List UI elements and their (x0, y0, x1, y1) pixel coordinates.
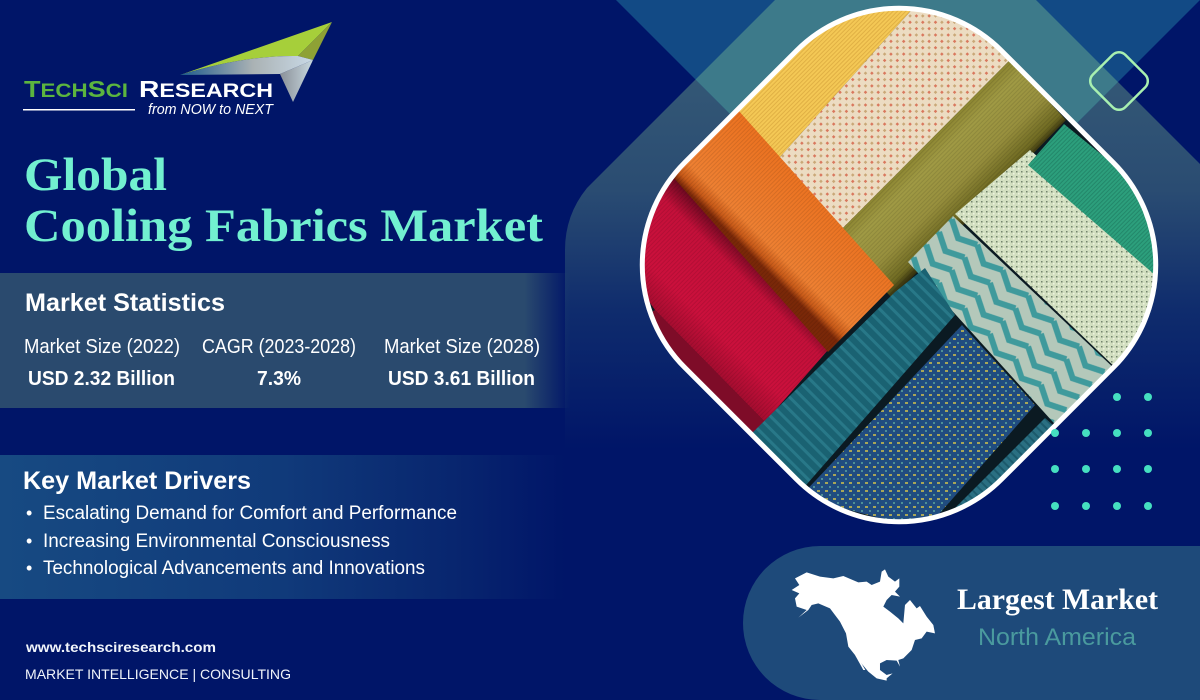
logo wordmark: RESEARCH (139, 76, 273, 102)
background geometric shapes (565, 0, 1200, 402)
herringbone fabric (908, 216, 1118, 432)
panel: largest market (743, 546, 1200, 700)
stat: market size 2028 (384, 336, 540, 390)
logo tagline: from NOW to NEXT (148, 102, 274, 118)
logo wordmark: TECH SCI (24, 76, 128, 102)
stat: market size 2022: USD 2.32 Billion (28, 368, 175, 390)
driver list: Increasing Environmental Consciousness (43, 531, 390, 552)
driver list: • (26, 558, 32, 578)
stat: CAGR: CAGR (2023-2028) (202, 336, 356, 358)
logo (23, 22, 332, 118)
label: north america: North America (978, 624, 1137, 651)
heading: market statistics: Market Statistics (25, 289, 225, 317)
yellow fabric (739, 10, 910, 157)
beige fabric (780, 11, 1008, 228)
dark red fabric (652, 310, 764, 432)
panel: market statistics (0, 273, 570, 408)
stat: CAGR (202, 336, 356, 390)
olive fabric (835, 60, 1066, 298)
stat: market size 2022 (24, 336, 180, 390)
dark teal fabric (745, 268, 955, 492)
dot grid (1051, 393, 1152, 510)
stat: market size 2028: USD 3.61 Billion (388, 368, 535, 390)
red fabric (644, 178, 827, 421)
title (24, 149, 543, 252)
dark teal lower fabric (955, 418, 1052, 508)
driver list: Escalating Demand for Comfort and Performance (43, 503, 457, 524)
orange fabric (672, 110, 894, 352)
photo border (582, 0, 1200, 582)
icon: north america map (792, 569, 935, 681)
green fabric (1028, 124, 1154, 274)
logo divider (23, 109, 135, 110)
driver list: Technological Advancements and Innovations (43, 558, 425, 579)
footer tagline: MARKET INTELLIGENCE | CONSULTING (25, 666, 291, 682)
blue speckled fabric (800, 325, 1035, 530)
fabric photo (640, 6, 1158, 524)
icon: paper plane (180, 22, 332, 102)
label: largest market: Largest Market (957, 583, 1158, 616)
footer website: www.techsciresearch.com (25, 639, 216, 655)
stat: CAGR: 7.3% (257, 368, 301, 390)
title: Cooling Fabrics Market (24, 200, 543, 252)
stat: market size 2028: Market Size (2028) (384, 336, 540, 358)
panel: key market drivers (0, 455, 565, 599)
driver list (26, 503, 457, 579)
title: Global (24, 149, 167, 201)
logo wordmark (24, 76, 273, 102)
heading: key market drivers: Key Market Drivers (23, 467, 251, 495)
driver list: • (26, 503, 32, 523)
speckled light fabric (955, 150, 1153, 365)
driver list: • (26, 531, 32, 551)
icon: outlined diamond (1086, 48, 1152, 114)
stat: market size 2022: Market Size (2022) (24, 336, 180, 358)
